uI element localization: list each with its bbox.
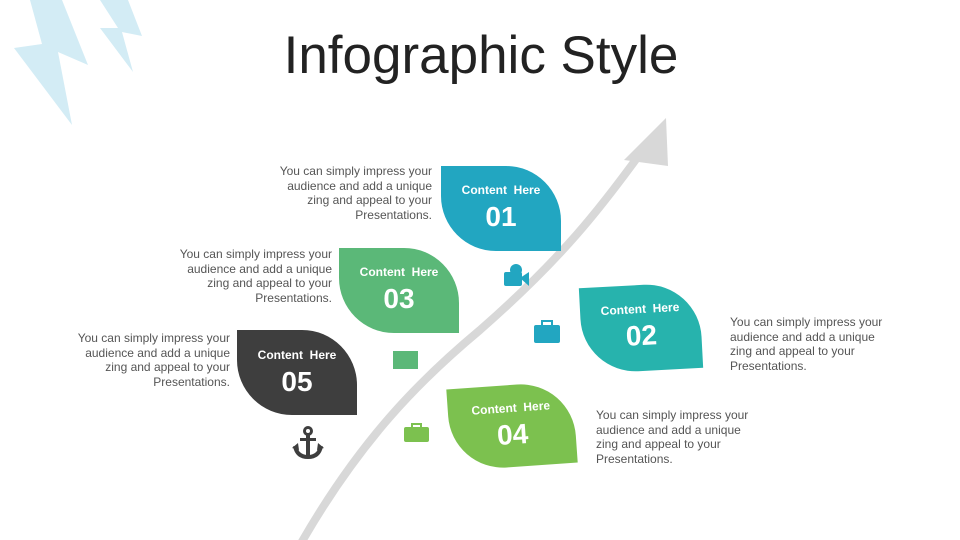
leaf 03: Content Here [360,265,438,279]
leaf 02: Content Here [600,300,680,318]
leaf 05: 05 [281,366,313,397]
text block 01: You can simply impress your audience and add a unique zing and appeal to your Presentations. [280,164,432,222]
icon: video camera [504,264,529,286]
icon: green rectangle [393,351,418,369]
leaf 01: 01 [485,201,517,232]
leaf 04: Content Here [471,398,550,418]
icon: briefcase blue [534,320,560,343]
leaf 05 [237,330,357,415]
title: Infographic Style [284,26,678,85]
icon: anchor [292,426,324,459]
leaf 02 [579,282,703,374]
text block 03: You can simply impress your audience and add a unique zing and appeal to your Presentations. [180,247,332,304]
text block 02: You can simply impress your audience and add a unique zing and appeal to your Presentations. [730,315,882,372]
leaf 05: Content Here [258,348,336,362]
leaf 03 [339,248,459,333]
leaf 01: Content Here [462,183,540,197]
leaf 03: 03 [383,283,415,314]
leaf 02: 02 [625,319,658,352]
leaf 04 [446,381,578,471]
text block 05: You can simply impress your audience and add a unique zing and appeal to your Presentations. [78,331,230,388]
leaf 04: 04 [496,418,529,451]
icon: green case [404,423,429,442]
text block 04: You can simply impress your audience and add a unique zing and appeal to your Presentations. [596,408,748,466]
leaf 01 [441,166,561,251]
